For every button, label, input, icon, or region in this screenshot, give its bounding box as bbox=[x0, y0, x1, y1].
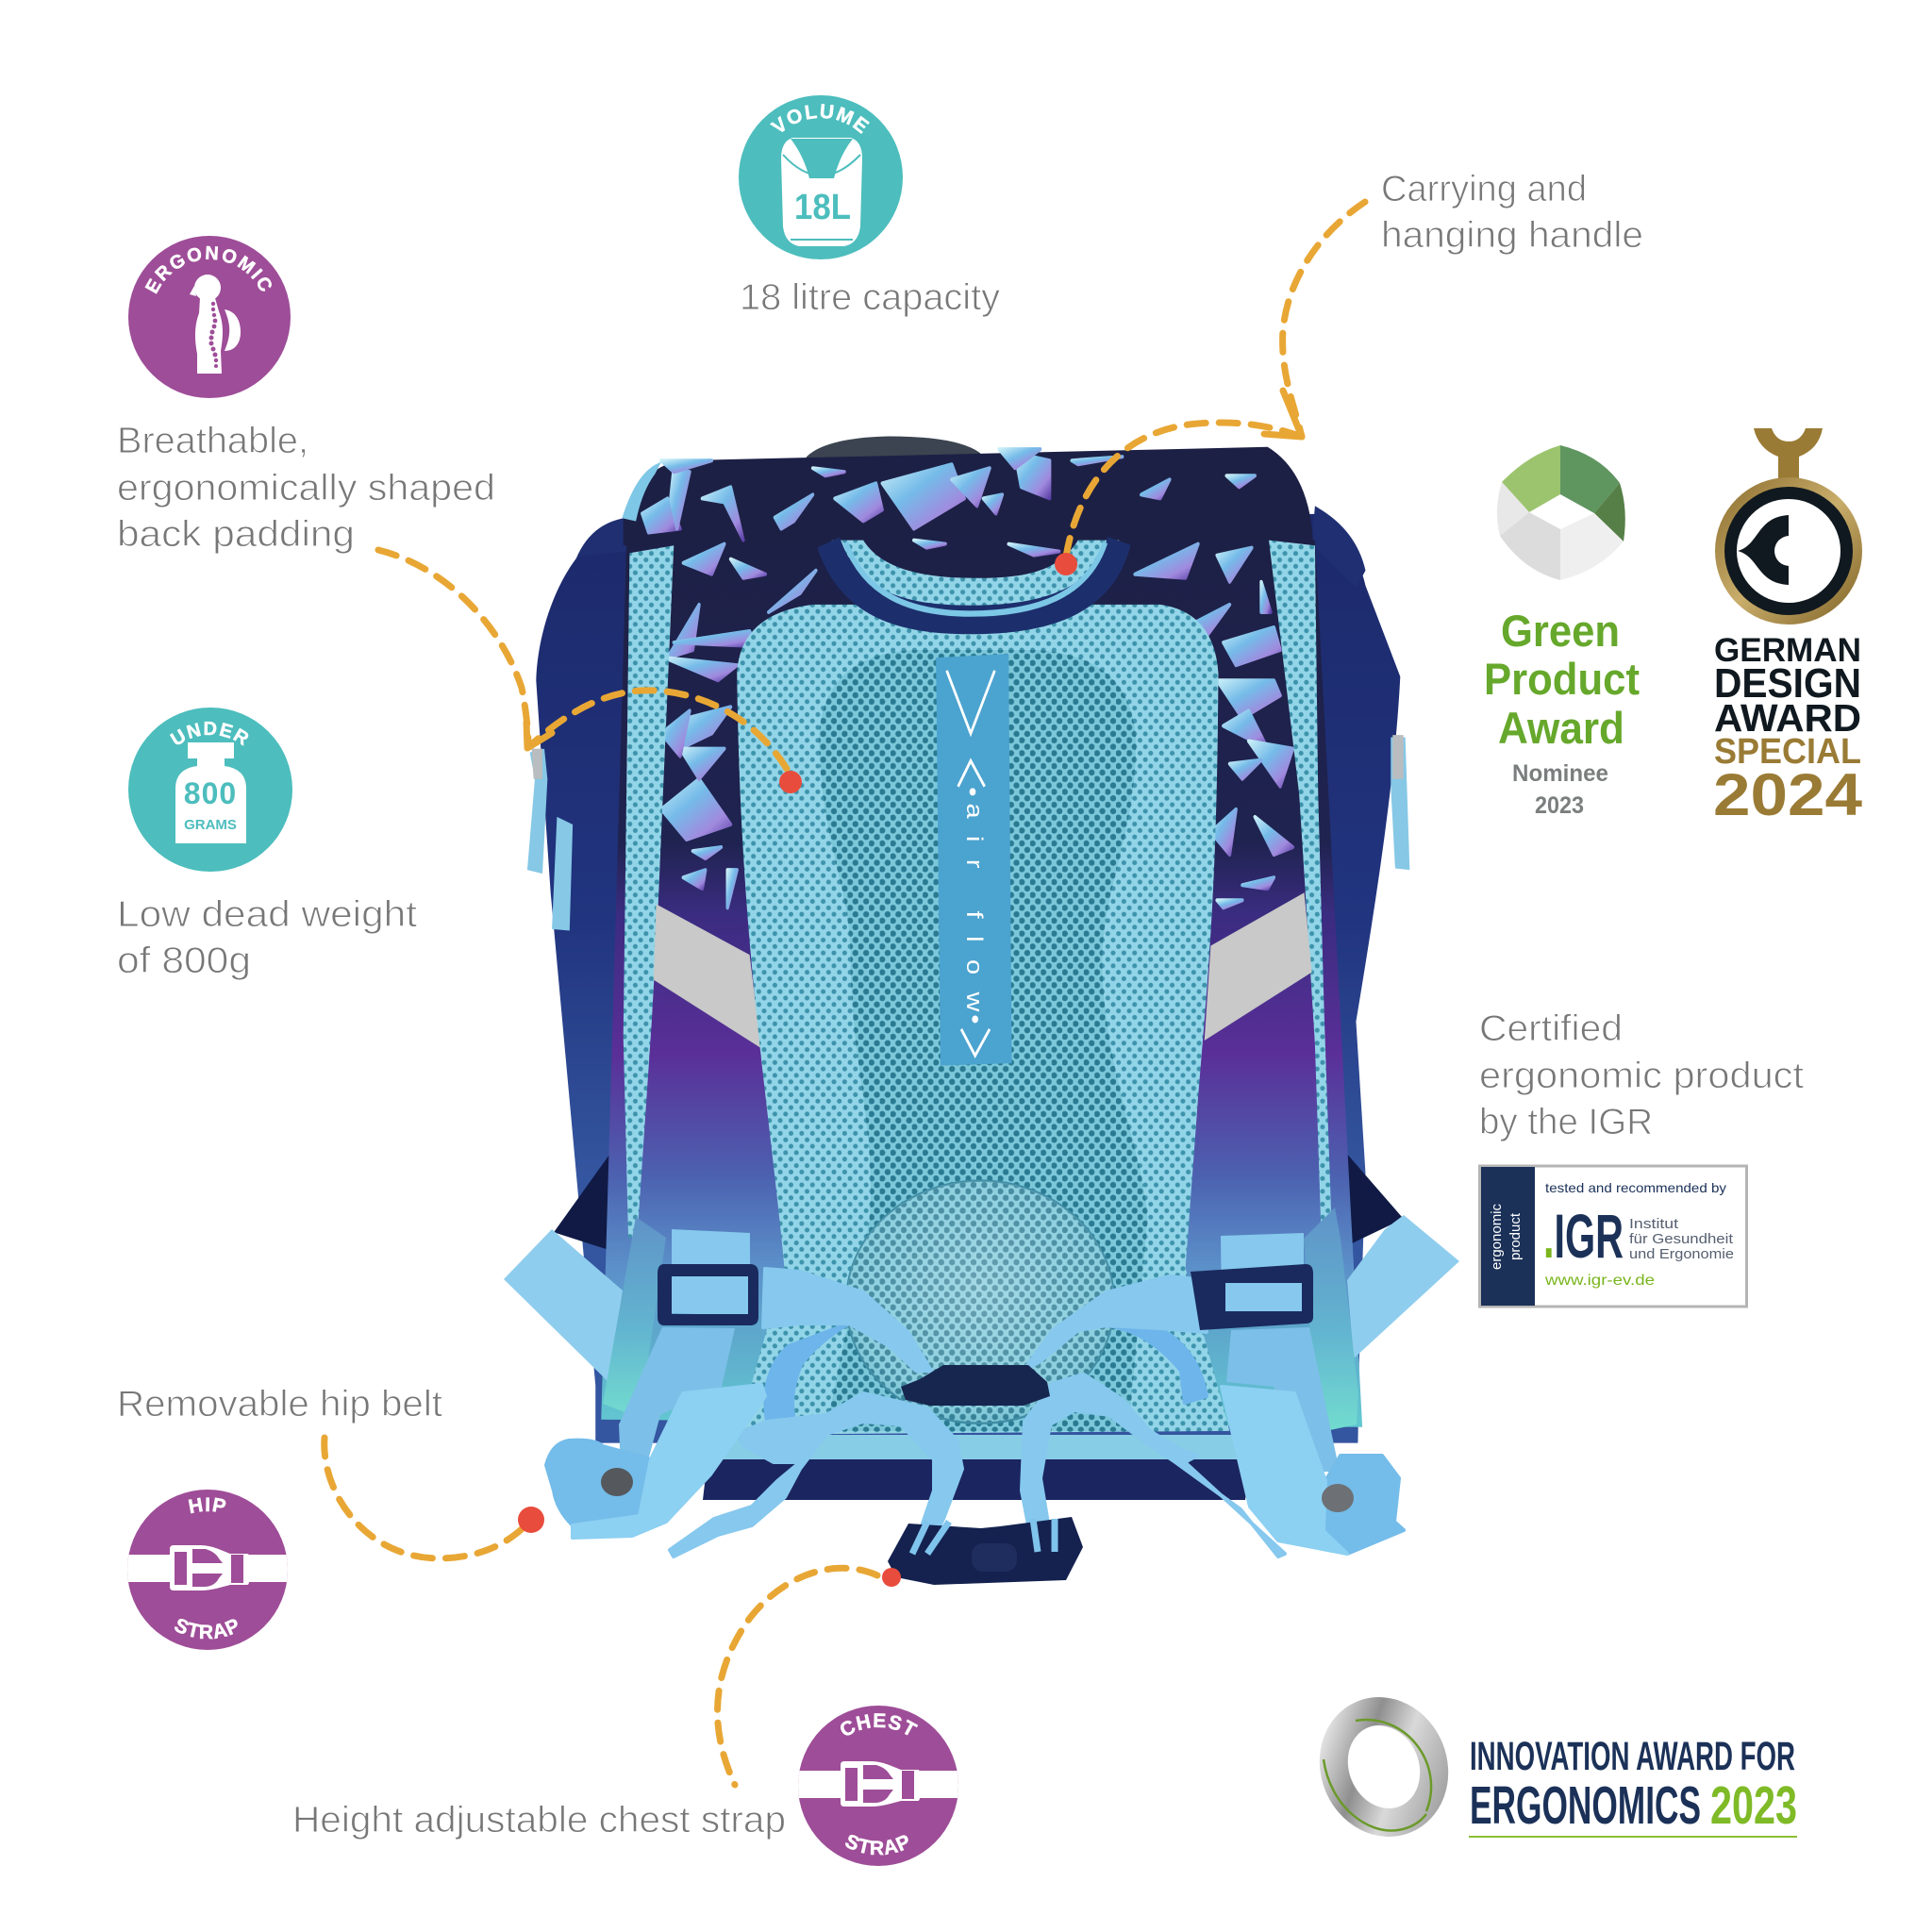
igr certification box: product bbox=[1507, 1212, 1524, 1260]
badge: chest strap bbox=[798, 1706, 958, 1866]
green product award logo: Award bbox=[1498, 703, 1624, 753]
left lower band bbox=[670, 1393, 962, 1557]
icon: weight: GRAMS bbox=[184, 817, 237, 833]
right edge strip bbox=[1304, 1208, 1358, 1431]
caption: dead weight: of 800g bbox=[117, 941, 251, 981]
backpack body bbox=[536, 513, 1400, 1443]
right wing strap bbox=[1347, 1215, 1459, 1358]
icon: spine figure bbox=[190, 275, 241, 374]
igr certification box: für Gesundheit bbox=[1629, 1231, 1734, 1247]
caption: back padding: Breathable, bbox=[117, 421, 308, 461]
icon: backpack bbox=[781, 138, 862, 246]
igr certification box: www.igr-ev.de bbox=[1544, 1273, 1655, 1289]
badge: under 800 grams: UNDER bbox=[170, 721, 249, 746]
icon: weight bbox=[175, 742, 246, 843]
icon: backpack: 18L bbox=[794, 188, 851, 227]
innovation award logo bbox=[1317, 1696, 1797, 1838]
caption: carrying handle bbox=[1381, 169, 1643, 256]
left foot knob bbox=[601, 1468, 633, 1496]
carry handle bbox=[807, 437, 980, 468]
german design award logo: AWARD bbox=[1714, 696, 1861, 740]
badge: hip strap: HIP bbox=[189, 1497, 226, 1513]
right lower band bbox=[1022, 1374, 1285, 1557]
icon: buckle bbox=[841, 1761, 920, 1807]
green product award logo bbox=[1484, 445, 1640, 819]
arrow: back padding bbox=[378, 550, 802, 793]
green product award logo: Green bbox=[1501, 606, 1620, 656]
igr certification box: Institut bbox=[1629, 1216, 1679, 1232]
hanging loop bbox=[828, 541, 1119, 620]
caption: carrying handle: Carrying and bbox=[1381, 169, 1587, 209]
german design award logo bbox=[1713, 428, 1862, 828]
badge: chest strap: STRAP bbox=[845, 1835, 908, 1855]
top flap bbox=[624, 447, 1313, 545]
air flow tag bbox=[936, 654, 1012, 1065]
back panel bbox=[601, 541, 1362, 1427]
caption: dead weight: Low dead weight bbox=[117, 894, 417, 935]
caption: back padding: back padding bbox=[117, 514, 355, 555]
badge: under 800 grams bbox=[128, 708, 292, 872]
lower mesh band bbox=[660, 1435, 1259, 1462]
back padding mesh bbox=[737, 605, 1230, 1435]
right curl strap bbox=[1107, 1325, 1207, 1403]
badge: volume 18L bbox=[739, 95, 903, 259]
left edge strip bbox=[603, 1217, 666, 1418]
badge: chest strap: CHEST bbox=[841, 1713, 919, 1736]
top side loops bbox=[575, 506, 1365, 588]
caption: dead weight bbox=[117, 894, 417, 981]
badge: volume 18L: VOLUME bbox=[770, 104, 870, 134]
badge: hip strap bbox=[127, 1490, 288, 1650]
caption: carrying handle: hanging handle bbox=[1381, 215, 1643, 256]
caption: certified: ergonomic product bbox=[1479, 1056, 1804, 1096]
air flow tag: air flow bbox=[962, 803, 988, 1012]
badge: ergonomic bbox=[128, 236, 291, 398]
right foot loop bbox=[1323, 1456, 1404, 1554]
caption: back padding bbox=[117, 421, 495, 555]
arrow: hip belt bbox=[325, 1438, 544, 1558]
igr certification box bbox=[1479, 1166, 1747, 1307]
innovation award logo: ERGONOMICS bbox=[1470, 1775, 1701, 1836]
german design award logo: DESIGN bbox=[1714, 660, 1861, 707]
icon: medal bbox=[1715, 428, 1862, 625]
caption: certified: by the IGR bbox=[1479, 1102, 1653, 1142]
igr certification box: ergonomic bbox=[1489, 1203, 1505, 1270]
arrow: chest strap bbox=[718, 1568, 901, 1785]
innovation award logo: 2023 bbox=[1710, 1775, 1797, 1836]
green product award logo: Nominee bbox=[1512, 760, 1608, 787]
lower chest buckle bbox=[888, 1517, 1083, 1585]
icon: buckle bbox=[170, 1545, 249, 1591]
icon: weight: 800 bbox=[184, 776, 237, 810]
igr certification box: und Ergonomie bbox=[1629, 1246, 1734, 1262]
inner mesh channel bbox=[819, 650, 1147, 1431]
left foot loop bbox=[546, 1441, 651, 1525]
left diagonal strap bbox=[763, 1269, 931, 1371]
arrow: carrying handle bbox=[1055, 202, 1365, 575]
igr certification box: tested and recommended by bbox=[1545, 1180, 1726, 1195]
icon: green product mark bbox=[1497, 445, 1625, 580]
side mesh strips bbox=[624, 545, 674, 1238]
caption: chest strap: Height adjustable chest strap bbox=[292, 1800, 786, 1840]
right upper strap piece bbox=[1221, 1233, 1304, 1313]
right ladder lock bbox=[1191, 1264, 1313, 1330]
backpack body and back panel bbox=[527, 437, 1409, 1443]
badge: ergonomic: ERGONOMIC bbox=[145, 245, 272, 294]
left vertical strap bbox=[619, 1327, 735, 1469]
lumbar dome bbox=[846, 1181, 1114, 1424]
right foot knob bbox=[1322, 1484, 1354, 1512]
german design award logo: SPECIAL bbox=[1714, 732, 1861, 772]
upper chest buckle bbox=[901, 1365, 1050, 1406]
green product award logo: 2023 bbox=[1535, 792, 1584, 819]
green product award logo: Product bbox=[1484, 654, 1640, 704]
caption: capacity: 18 litre capacity bbox=[740, 277, 1001, 318]
icon: silver ring bbox=[1317, 1696, 1451, 1838]
reflective stripes bbox=[654, 892, 1312, 1048]
caption: certified: Certified bbox=[1479, 1008, 1623, 1049]
left ladder lock bbox=[658, 1264, 758, 1325]
right vertical strap bbox=[1226, 1327, 1340, 1472]
german design award logo: GERMAN bbox=[1714, 632, 1861, 669]
caption: back padding: ergonomically shaped bbox=[117, 468, 495, 508]
left strap fold bbox=[573, 1385, 765, 1538]
igr certification box: .IGR bbox=[1543, 1201, 1624, 1271]
right strap fold bbox=[1222, 1387, 1347, 1554]
bottom navy base bbox=[703, 1459, 1250, 1500]
german design award logo: 2024 bbox=[1713, 762, 1862, 828]
badge: hip strap: STRAP bbox=[175, 1619, 238, 1640]
left curl strap bbox=[765, 1324, 849, 1448]
confetti print bbox=[642, 449, 1292, 908]
left upper strap piece bbox=[672, 1229, 750, 1316]
backpack photo illustration bbox=[504, 437, 1459, 1585]
right diagonal strap bbox=[1024, 1276, 1207, 1371]
caption: certified bbox=[1479, 1008, 1804, 1142]
caption: hip belt: Removable hip belt bbox=[117, 1384, 442, 1424]
side pocket shadows bbox=[554, 1135, 1404, 1257]
zipper pulls bbox=[527, 738, 1409, 930]
left wing strap bbox=[504, 1229, 623, 1382]
